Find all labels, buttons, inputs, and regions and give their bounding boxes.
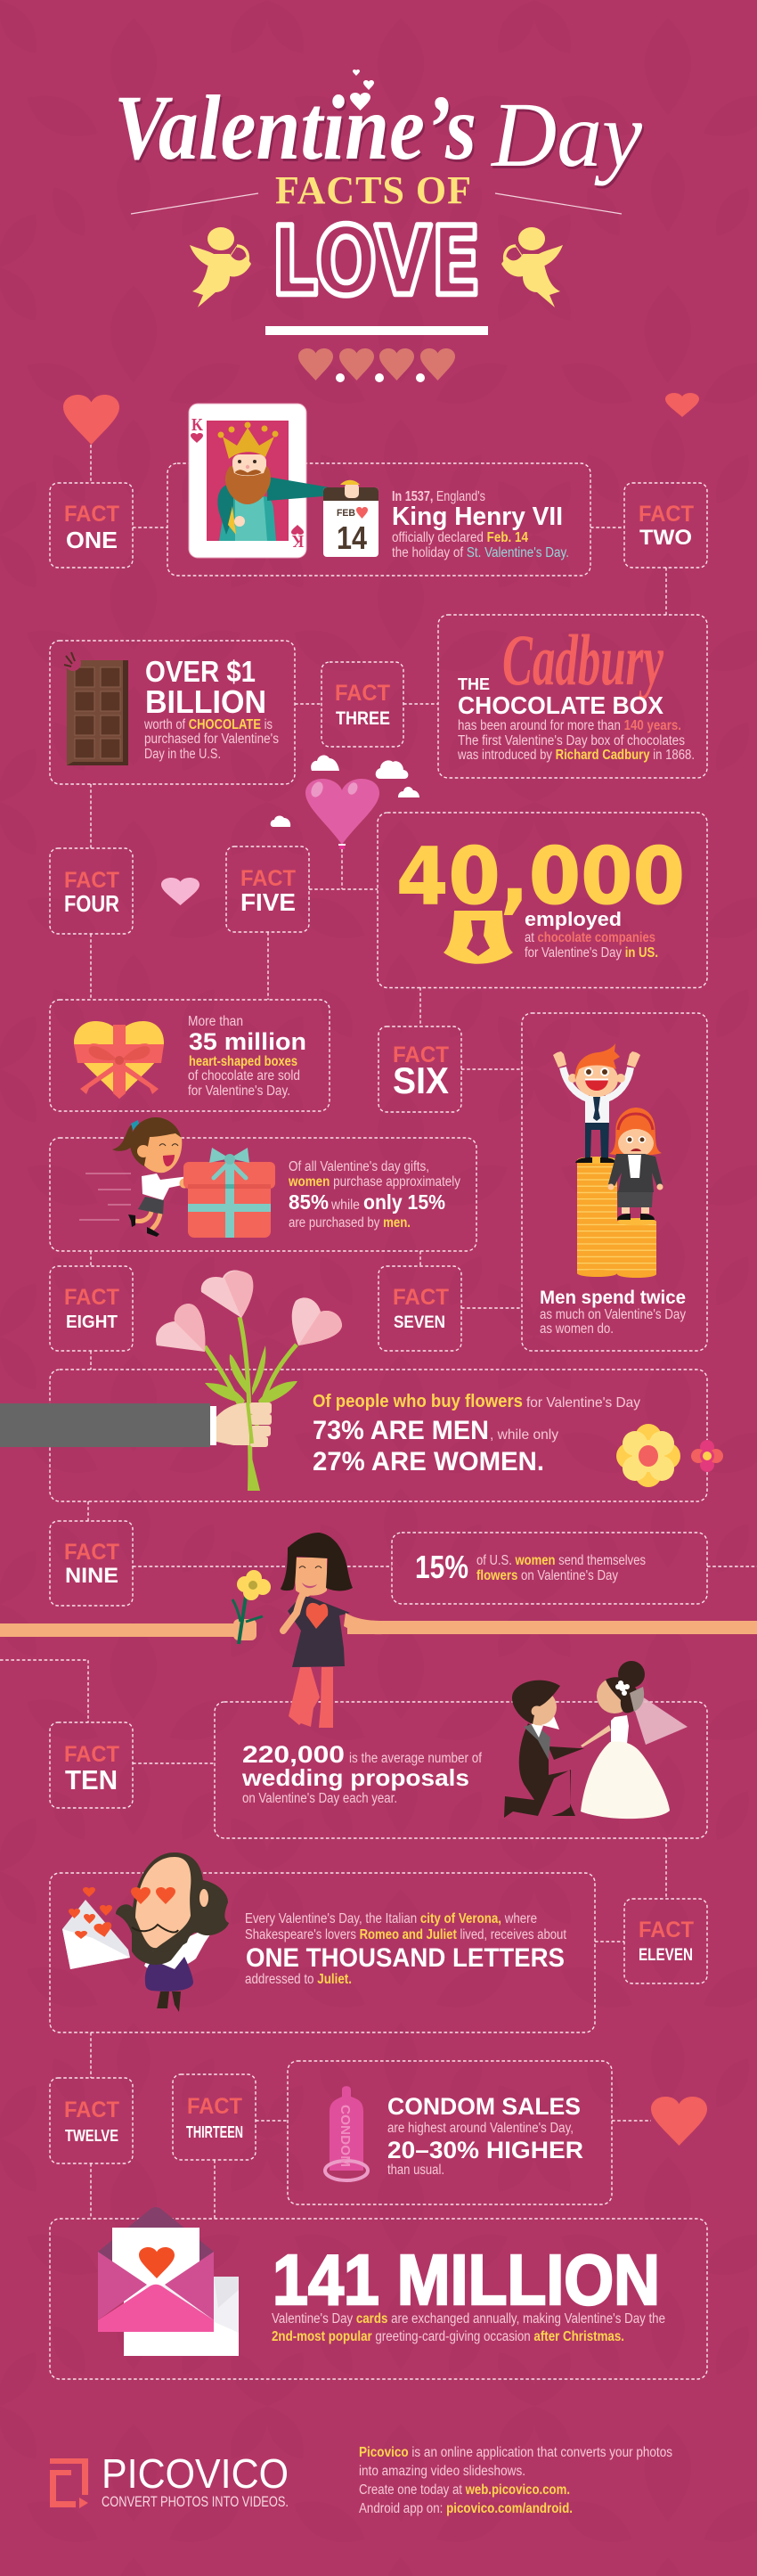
cadbury text: has been around for more than 140 years. <box>458 718 681 733</box>
left arm holding flower <box>0 1570 271 1644</box>
illustration: girl running <box>112 1117 198 1237</box>
title <box>114 70 643 382</box>
employed text: employed <box>525 908 622 930</box>
fact eight label <box>50 1266 133 1351</box>
fact five label: FIVE <box>240 888 296 916</box>
title: Valentine's Day script: Valentine’s <box>114 77 476 179</box>
icon: chocolate bar <box>64 652 128 765</box>
king henry text: the holiday of St. Valentine's Day. <box>392 545 569 560</box>
proposals text: wedding proposals <box>241 1764 469 1791</box>
illustration: girl with arms <box>0 1533 757 1728</box>
icon: row of hearts <box>298 348 455 382</box>
fact two label: FACT <box>639 502 694 527</box>
panel: 35 million heart boxes <box>50 1000 330 1111</box>
footer text: Android app on: picovico.com/android. <box>359 2501 573 2516</box>
gifts text <box>288 1159 460 1231</box>
fact twelve label <box>50 2078 133 2163</box>
billion text: purchased for Valentine's <box>144 732 279 747</box>
fact one label: ONE <box>66 527 118 553</box>
141 million text: 2nd-most popular greeting-card-giving occasion after Christmas. <box>272 2329 624 2344</box>
icon: small hearts above title <box>350 70 374 110</box>
fact twelve label: TWELVE <box>65 2127 118 2145</box>
35 million text <box>188 1014 306 1099</box>
billion text: worth of CHOCOLATE is <box>143 717 273 732</box>
panel: wedding proposals <box>215 1661 707 1838</box>
logo: picovico: CONVERT PHOTOS INTO VIDEOS. <box>102 2493 289 2510</box>
employed text <box>525 908 658 961</box>
gifts text: while <box>330 1198 360 1213</box>
gifts text: 85% <box>289 1190 329 1214</box>
icon: condom <box>325 2086 368 2180</box>
condom text: CONDOM SALES <box>387 2093 581 2120</box>
fact three label: THREE <box>336 708 390 729</box>
verona text: Every Valentine's Day, the Italian city of Verona, where <box>245 1911 537 1926</box>
fact six label: SIX <box>393 1059 449 1101</box>
icon: calendar feb 14: FEB <box>337 508 355 519</box>
fact six label: FACT <box>393 1043 449 1067</box>
fact one label <box>50 483 133 568</box>
fact eight label: FACT <box>64 1285 119 1310</box>
fact ten label <box>50 1722 133 1808</box>
panel: 15 percent women: 15% <box>415 1549 468 1585</box>
icon: playing card king: K <box>191 415 203 435</box>
fact seven label: SEVEN <box>394 1313 445 1332</box>
men spend text: Men spend twice <box>540 1288 686 1308</box>
fact six label <box>378 1026 461 1112</box>
men spend text <box>540 1288 686 1337</box>
condom text: than usual. <box>387 2163 444 2178</box>
gifts text: Of all Valentine's day gifts, <box>289 1159 429 1174</box>
gifts text: women purchase approximately <box>288 1174 460 1190</box>
fact eleven label: ELEVEN <box>639 1946 693 1965</box>
icon: heart gift box <box>74 1021 164 1099</box>
fact two label <box>624 483 707 568</box>
icon: coin stacks <box>577 1157 656 1278</box>
verona text: ONE THOUSAND LETTERS <box>246 1943 565 1973</box>
fact eleven label <box>624 1899 707 1983</box>
panel: over 1 billion chocolate <box>50 641 295 784</box>
panel: flowers <box>0 1271 723 1501</box>
gifts text: only 15% <box>363 1190 445 1214</box>
men spend text: as women do. <box>540 1321 614 1337</box>
gifts text: are purchased by men. <box>289 1215 411 1231</box>
title: LOVE outlined: LOVE <box>272 207 481 316</box>
proposals text <box>241 1741 483 1806</box>
footer text <box>359 2445 672 2516</box>
icon: heart right <box>651 2097 707 2146</box>
panel: women purchase gifts <box>50 1117 476 1251</box>
panel: letters to juliet <box>50 1852 595 2032</box>
panel: condom sales <box>288 2061 612 2204</box>
flowers text: for Valentine's Day <box>526 1395 640 1411</box>
panel: 15 percent women: of U.S. women send themselves <box>476 1553 646 1568</box>
king henry text <box>392 489 569 560</box>
flowers text: Of people who buy flowers <box>313 1392 523 1411</box>
proposals text: on Valentine's Day each year. <box>242 1791 397 1806</box>
condom text: 20–30% HIGHER <box>387 2137 583 2163</box>
employed text: at chocolate companies <box>525 930 655 945</box>
icon: playing card king: K <box>292 531 304 551</box>
icon: calendar feb 14 <box>323 480 378 557</box>
logo: picovico: PICOVICO <box>102 2450 289 2497</box>
icon: right cupid <box>501 227 563 307</box>
men spend text: as much on Valentine's Day <box>540 1307 686 1322</box>
35 million text: 35 million <box>189 1028 306 1055</box>
fact three label: FACT <box>335 681 390 706</box>
icon: shirt and tie <box>444 911 513 964</box>
fact three label <box>322 662 403 747</box>
icon: gift box <box>183 1148 275 1238</box>
illustration: happy man <box>553 1043 640 1163</box>
flowers text: 27% ARE WOMEN. <box>313 1447 544 1476</box>
flowers text: , while only <box>490 1427 558 1443</box>
panel: 40,000 employed <box>378 813 707 987</box>
fact ten label: TEN <box>65 1764 118 1795</box>
icon: heart balloon <box>305 779 379 849</box>
illustration: bouquet in hand <box>0 1271 342 1491</box>
fact eight label: EIGHT <box>66 1313 118 1332</box>
verona text: Shakespeare's lovers Romeo and Juliet lived, receives about <box>245 1927 567 1942</box>
panel: 15 percent women: flowers on Valentine's Day <box>476 1568 618 1583</box>
icon: clouds <box>271 755 419 827</box>
cadbury text <box>457 675 695 763</box>
billion text: OVER $1 <box>145 655 256 688</box>
fact ten label: FACT <box>64 1742 119 1767</box>
title: Valentine's Day script: Day <box>490 84 643 186</box>
icon: large heart <box>63 395 119 445</box>
speed lines <box>79 1174 131 1220</box>
verona text <box>245 1911 567 1987</box>
illustration: bride <box>581 1661 688 1819</box>
icon: small heart <box>665 393 699 417</box>
woman in dress <box>281 1533 757 1728</box>
icon: envelope with heart <box>98 2207 239 2356</box>
illustration: shakespeare with envelope <box>62 1852 229 2012</box>
icon: pink heart <box>161 878 199 905</box>
fact four label <box>50 848 133 934</box>
billion text <box>143 655 279 762</box>
flowers text <box>313 1392 640 1476</box>
illustration: groom kneeling <box>504 1681 584 1818</box>
logo: picovico <box>50 2450 289 2510</box>
panel: king henry <box>167 404 590 576</box>
icon: left cupid <box>190 227 251 307</box>
icon: small flower <box>691 1440 723 1472</box>
subtitle: facts of: FACTS OF <box>275 168 471 212</box>
proposals text: 220,000 <box>242 1741 345 1768</box>
fact one label: FACT <box>64 502 119 527</box>
cadbury text: was introduced by Richard Cadbury in 1868. <box>457 748 695 763</box>
icon: playing card king <box>189 404 330 558</box>
verona text: addressed to Juliet. <box>245 1972 352 1987</box>
35 million text: for Valentine's Day. <box>188 1084 290 1099</box>
panel: 15 percent women <box>392 1533 707 1604</box>
footer text: Picovico is an online application that converts your photos <box>359 2445 672 2460</box>
35 million text: of chocolate are sold <box>188 1068 300 1084</box>
icon: condom: CONDOM <box>338 2105 353 2167</box>
fact thirteen label: THIRTEEN <box>186 2123 243 2141</box>
icon: calendar feb 14: 14 <box>337 519 367 556</box>
141 million text: Valentine's Day cards are exchanged annually, making Valentine's Day the <box>272 2311 665 2327</box>
fact eleven label: FACT <box>639 1918 694 1942</box>
fact seven label <box>378 1266 461 1351</box>
fact thirteen label <box>173 2074 256 2160</box>
title underline bar <box>265 326 488 335</box>
king henry text: officially declared Feb. 14 <box>392 530 528 545</box>
fact twelve label: FACT <box>64 2098 119 2122</box>
stat: 40,000: 40,000 <box>396 830 685 922</box>
fact four label: FOUR <box>64 890 119 917</box>
fact four label: FACT <box>64 868 119 893</box>
cadbury text: CHOCOLATE BOX <box>458 691 663 719</box>
condom text: are highest around Valentine's Day, <box>387 2121 574 2136</box>
35 million text: More than <box>188 1014 243 1029</box>
panel: men spend twice <box>522 1013 707 1351</box>
king henry text: In 1537, England's <box>392 489 485 504</box>
fact nine label <box>50 1521 133 1606</box>
footer text: into amazing video slideshows. <box>359 2464 525 2479</box>
cadbury text: THE <box>458 675 490 693</box>
35 million text: heart-shaped boxes <box>189 1054 297 1069</box>
employed text: for Valentine's Day in US. <box>525 945 658 961</box>
condom text <box>387 2093 583 2178</box>
icon: picovico frame <box>50 2458 88 2508</box>
icon: large flower <box>616 1424 680 1487</box>
panel: cadbury chocolate box <box>438 615 707 778</box>
logo: cadbury script: Cadbury <box>502 619 663 700</box>
flowers text: 73% ARE MEN <box>313 1416 489 1445</box>
proposals text: is the average number of <box>349 1751 483 1766</box>
panel: 141 million cards <box>50 2207 707 2379</box>
footer text: Create one today at web.picovico.com. <box>359 2482 570 2498</box>
billion text: BILLION <box>145 683 266 720</box>
fact five label <box>226 846 309 932</box>
fact seven label: FACT <box>393 1285 449 1310</box>
fact two label: TWO <box>639 526 692 550</box>
illustration: sad woman <box>607 1108 663 1220</box>
billion text: Day in the U.S. <box>144 747 221 762</box>
fact five label: FACT <box>240 866 296 891</box>
fact nine label: NINE <box>65 1564 118 1588</box>
king henry text: King Henry VII <box>392 503 563 531</box>
fact nine label: FACT <box>64 1540 119 1565</box>
cadbury text: The first Valentine's Day box of chocolates <box>458 733 685 748</box>
fact thirteen label: FACT <box>187 2094 242 2119</box>
141 million text: 141 MILLION <box>273 2240 660 2319</box>
